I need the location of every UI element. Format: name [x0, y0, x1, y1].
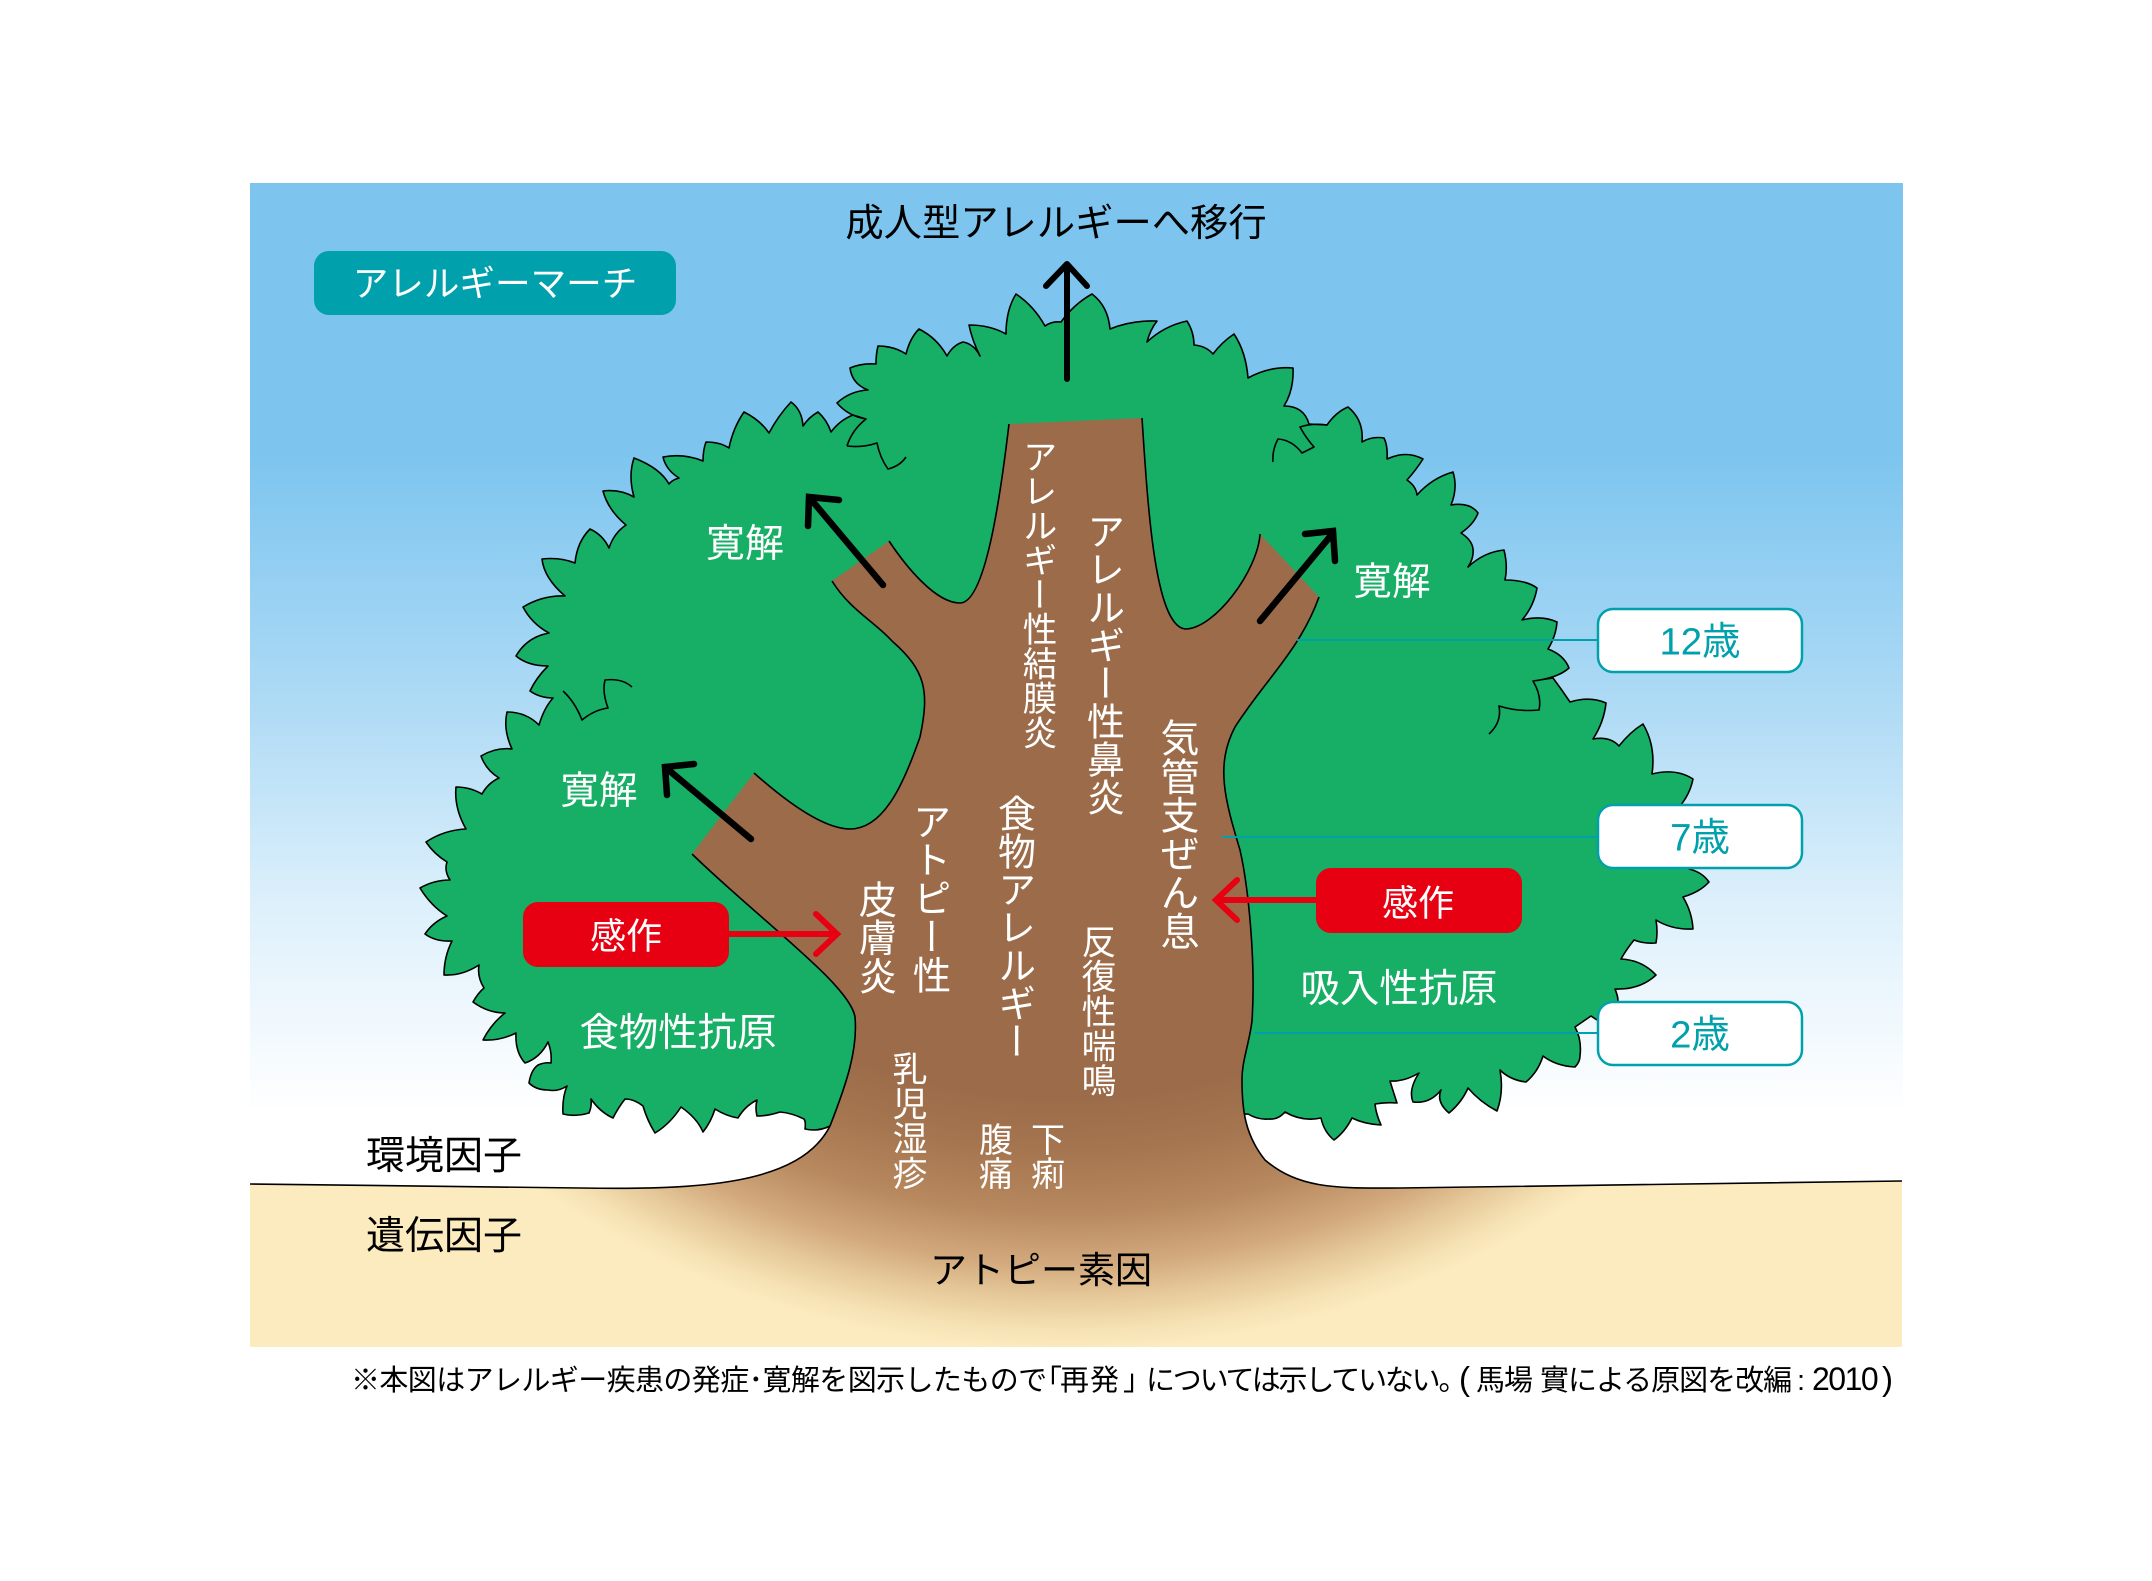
- footnote: については示していない。: [1146, 1365, 1465, 1397]
- vertical label: allergic conjunctivitis: アレルギー性結膜炎: [1015, 439, 1065, 750]
- age box: 2 years: 2歳: [1670, 1014, 1730, 1057]
- footnote: ): [1882, 1360, 1893, 1397]
- callout: sensitization right with arrow: [1216, 868, 1522, 933]
- age box: 7 years: 7歳: [1670, 817, 1730, 860]
- tree crown foliage: [420, 294, 1709, 1140]
- footnote: 馬場: [1476, 1364, 1532, 1397]
- age guide lines: [1222, 640, 1597, 1033]
- label: genetic factors: 遺伝因子: [366, 1215, 522, 1258]
- label: food allergen: 食物性抗原: [580, 1011, 776, 1055]
- age box: 12 years: 12歳: [1659, 621, 1741, 664]
- arrow: up to adult allergy: [1046, 264, 1087, 379]
- vertical label: infant eczema: 乳児湿疹: [885, 1051, 935, 1190]
- footnote: 」: [1123, 1365, 1152, 1397]
- footnote: :: [1797, 1365, 1805, 1397]
- footnote: 2010: [1812, 1361, 1878, 1397]
- age box: 12 years: [1598, 609, 1802, 672]
- footnote: (: [1459, 1360, 1470, 1397]
- label: remission upper right: 寛解: [1353, 561, 1431, 604]
- tree trunk and ground with atopy gradient: [250, 418, 1902, 1347]
- trunk and ground outline: [250, 418, 1902, 1188]
- footnote: 「: [1033, 1365, 1062, 1397]
- footnote: 實による原図を改編: [1540, 1364, 1791, 1397]
- label: inhaled allergen: 吸入性抗原: [1301, 967, 1497, 1011]
- callout: sensitization left with arrow: [523, 902, 837, 967]
- label: environmental factors: 環境因子: [366, 1135, 522, 1178]
- label: remission upper left: 寛解: [706, 523, 784, 566]
- arrow: remission upper left: [808, 497, 883, 585]
- age box: 2 years: [1598, 1002, 1802, 1065]
- vertical label: diarrhea: 下痢: [1024, 1122, 1072, 1190]
- legend pill: allergy march: アレルギーマーチ: [353, 264, 637, 304]
- sky background: [250, 183, 1903, 1347]
- arrow: remission upper right: [1260, 531, 1335, 621]
- callout: sensitization right with arrow: 感作: [1382, 882, 1454, 924]
- vertical label: abdominal pain: 腹痛: [972, 1122, 1020, 1190]
- footnote: ※本図はアレルギー疾患の発症･寛解を図示したもので: [351, 1364, 1047, 1397]
- vertical label: dermatitis: 皮膚炎: [850, 880, 906, 995]
- footnote: 再発: [1060, 1364, 1120, 1397]
- label: remission lower left: 寛解: [560, 770, 638, 813]
- arrow: remission lower left: [665, 764, 751, 839]
- age box: 7 years: [1598, 805, 1802, 868]
- vertical label: allergic rhinitis: アレルギー性鼻炎: [1078, 512, 1134, 816]
- callout: sensitization left with arrow: 感作: [590, 916, 662, 956]
- heading: transition to adult allergy: 成人型アレルギーへ移行: [845, 202, 1267, 245]
- vertical label: atopic: アトピー性: [904, 802, 960, 994]
- legend pill: allergy march: [314, 251, 676, 315]
- vertical label: food allergy: 食物アレルギー: [990, 794, 1044, 1060]
- vertical label: recurrent wheezing: 反復性喘鳴: [1074, 924, 1124, 1098]
- vertical label: bronchial asthma: 気管支ぜん息: [1152, 718, 1208, 950]
- label: atopic predisposition: アトピー素因: [930, 1250, 1152, 1291]
